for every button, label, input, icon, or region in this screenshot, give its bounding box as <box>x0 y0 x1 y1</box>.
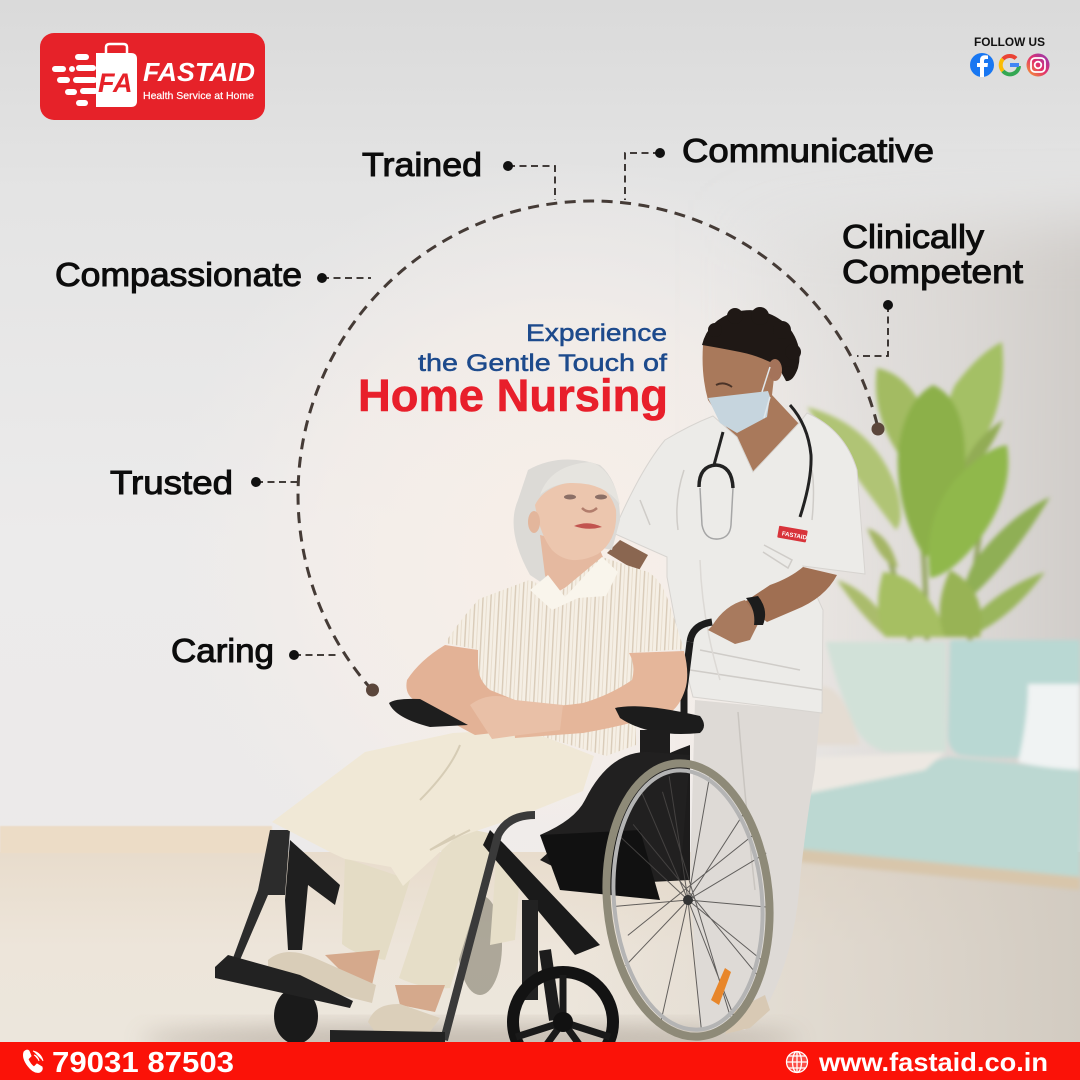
frame under seat <box>540 830 660 900</box>
nurse <box>607 307 865 1034</box>
rear wheel back <box>458 895 502 995</box>
heading: Experience <box>526 320 667 347</box>
pocket badge: FASTAID <box>781 531 808 542</box>
plant <box>807 342 1050 640</box>
blanket <box>272 729 594 886</box>
left arm <box>406 645 520 735</box>
heading: Home Nursing <box>358 370 668 421</box>
trait labels: Clinically <box>842 218 985 255</box>
small caster <box>513 972 613 1072</box>
big wheel <box>595 756 784 1044</box>
legrest <box>233 830 290 960</box>
trait labels <box>55 132 1023 669</box>
face <box>535 481 616 560</box>
footer bar <box>0 1042 1080 1080</box>
icon: google <box>1001 56 1019 74</box>
reflector <box>711 968 731 1005</box>
icon: instagram <box>1026 54 1050 76</box>
wheelchair front parts <box>215 699 784 1072</box>
shirt <box>445 557 684 756</box>
neck <box>540 535 605 595</box>
nose <box>582 508 597 512</box>
nurse trousers <box>690 700 820 1030</box>
heading <box>358 320 668 421</box>
arc end dots <box>366 422 884 696</box>
fringe <box>540 462 620 505</box>
eyes <box>564 494 607 500</box>
collar <box>530 557 618 610</box>
trait labels: Compassionate <box>55 256 302 293</box>
icon: phone <box>24 1050 43 1072</box>
nurse eye <box>716 383 732 387</box>
ankles <box>325 950 380 985</box>
icon: facebook <box>970 53 994 77</box>
nurse neck and face <box>703 345 800 475</box>
pocket badge <box>777 526 808 543</box>
right trouser leg <box>399 825 520 988</box>
nurse left arm <box>607 540 648 572</box>
follow us: FOLLOW US <box>974 35 1045 49</box>
nurse hand <box>708 600 760 644</box>
scrub shading <box>640 470 822 690</box>
right arm <box>512 651 687 738</box>
mask strap <box>762 367 770 418</box>
tagline: Health Service at Home <box>143 90 254 102</box>
brand name: FASTAID <box>143 57 255 87</box>
nurse hair <box>702 307 801 381</box>
bag icon: FA <box>98 68 133 98</box>
vertical fork <box>522 900 538 1000</box>
heading: the Gentle Touch of <box>418 350 667 377</box>
right armrest <box>615 706 704 734</box>
footplate <box>215 955 353 1008</box>
nurse shoe <box>725 995 770 1034</box>
trait labels: Communicative <box>682 132 934 169</box>
trait labels: Competent <box>842 253 1023 290</box>
surgical mask <box>708 391 770 433</box>
dashed arc <box>298 201 878 690</box>
left trouser leg <box>342 858 410 960</box>
frame post <box>640 730 670 800</box>
patient <box>268 460 687 1036</box>
left armrest <box>389 699 468 727</box>
logo <box>40 33 265 120</box>
leader dots <box>251 148 893 660</box>
nurse scrub top <box>613 413 865 713</box>
leader lines <box>256 153 888 655</box>
bag icon <box>96 44 137 107</box>
sofa <box>800 640 1080 890</box>
trait labels: Trusted <box>110 464 233 501</box>
seat mechanics <box>540 745 690 885</box>
front frame tube <box>444 815 535 1040</box>
trait labels: Trained <box>362 146 482 183</box>
speed strips <box>52 54 98 106</box>
front caster wheel <box>274 988 318 1044</box>
wheelchair back parts <box>233 622 712 1044</box>
trait labels: Caring <box>171 632 274 669</box>
left shoe <box>268 952 376 1003</box>
smile <box>574 523 602 529</box>
nurse forearm <box>743 567 837 622</box>
watch <box>746 596 765 625</box>
website: www.fastaid.co.in <box>818 1047 1048 1077</box>
right shoe <box>368 1004 440 1036</box>
strap <box>483 830 600 955</box>
stethoscope <box>699 405 811 539</box>
nurse ear <box>768 359 782 381</box>
hair back <box>514 460 620 585</box>
push handle <box>690 622 712 642</box>
hands <box>470 696 563 739</box>
seat side panel <box>540 752 690 880</box>
ear <box>528 511 540 533</box>
follow us <box>970 35 1050 77</box>
icon: globe <box>786 1051 808 1073</box>
phone number: 79031 87503 <box>52 1047 234 1079</box>
